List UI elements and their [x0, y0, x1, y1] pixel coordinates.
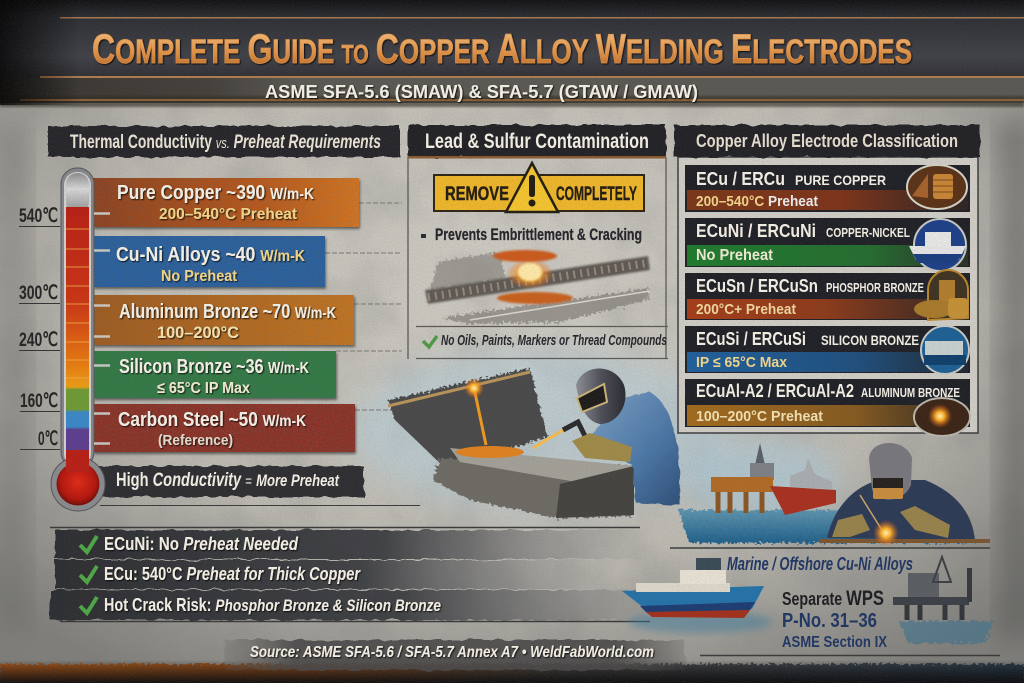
row: aluminum bronze: 100–200°C Preheat [696, 408, 823, 425]
panel: thermal conductivity vs preheat [19, 126, 420, 511]
row: aluminum bronze: ALUMINUM BRONZE [861, 385, 960, 400]
icon: offshore platform [921, 326, 969, 374]
row: phosphor bronze: PHOSPHOR BRONZE [826, 280, 924, 295]
bar: copper-nickel alloys: No Preheat [161, 268, 238, 285]
subtitle: ASME SFA-5.6 (SMAW) & SFA-5.7 (GTAW / GMAW) [265, 82, 698, 102]
plate [388, 368, 547, 470]
water [678, 510, 975, 543]
red ship [770, 458, 836, 515]
panel: electrode classification [674, 125, 980, 436]
bar: pure copper: Pure Copper ~390 W/m-K [117, 182, 314, 204]
bar: aluminum bronze: Aluminum Bronze ~70 W/m-K [119, 301, 336, 323]
heading: classification: Copper Alloy Electrode Classification [696, 131, 958, 151]
illustration: welder at copper plate [388, 368, 680, 518]
header band [0, 0, 1024, 107]
molten pool [456, 446, 524, 458]
row: silicon bronze [685, 326, 970, 373]
temperature scale: 240℃ [19, 330, 58, 351]
row: silicon bronze: SILICON BRONZE [821, 332, 919, 348]
warning sign: REMOVE [445, 184, 509, 205]
panel: lead and sulfur contamination [408, 125, 668, 359]
helmet [869, 443, 912, 500]
temperature guide lines [100, 203, 420, 506]
gloves [832, 506, 950, 538]
illustration: weld on rod [425, 250, 650, 324]
base block [432, 458, 632, 518]
icon: bronze coins [914, 270, 968, 320]
band: no preheat note [55, 530, 655, 559]
welder body [585, 392, 680, 505]
row: silicon bronze: ECuSi / ERCuSi [696, 329, 806, 349]
row: phosphor bronze: 200°C+ Preheat [696, 301, 796, 318]
band: thick copper note [55, 560, 615, 589]
band: hot crack note [50, 590, 690, 620]
bullet text: Prevents Embrittlement & Cracking [435, 225, 642, 244]
warning sign [434, 163, 644, 212]
panel frame [408, 157, 668, 359]
row: copper-nickel [685, 218, 970, 267]
arc glow [464, 378, 484, 398]
welder body [827, 480, 975, 540]
source line [225, 640, 685, 670]
bullet text [421, 225, 642, 244]
callout: high conductivity: High Conductivity = More Preheat [116, 470, 340, 491]
heading: classification [674, 125, 980, 157]
sparks [873, 520, 899, 546]
text: wps: Separate WPS [782, 587, 884, 610]
bar: pure copper [93, 178, 359, 227]
icon: copper stock [907, 165, 967, 209]
text: wps: P-No. 31–36 [782, 610, 877, 632]
bar: copper-nickel alloys [93, 236, 325, 287]
row: phosphor bronze: ECuSn / ERCuSn [696, 276, 818, 296]
bar: carbon steel [93, 404, 355, 452]
offshore platform [893, 557, 994, 643]
band: hot crack note: Hot Crack Risk: Phosphor Bronze & Silicon Bronze [104, 595, 441, 615]
temperature scale [19, 206, 60, 450]
band: thick copper note: ECu: 540°C Preheat for Thick Copper [104, 564, 361, 584]
panel frame [678, 157, 978, 433]
heading: lead and sulfur: Lead & Sulfur Contamination [425, 130, 649, 153]
row: phosphor bronze [685, 273, 970, 320]
row: copper-nickel: No Preheat [696, 247, 774, 264]
temperature scale: 300℃ [19, 283, 58, 304]
band: no preheat note: ECuNi: No Preheat Needed [104, 534, 299, 554]
visor [873, 478, 903, 488]
title: COMPLETE GUIDE TO COPPER ALLOY WELDING ELECTRODES [92, 25, 912, 72]
callout: high conductivity [96, 466, 364, 497]
temperature scale: 540℃ [19, 206, 58, 227]
temperature scale: 160℃ [20, 391, 58, 412]
bar: carbon steel: Carbon Steel ~50 W/m-K [118, 409, 306, 431]
icon: aluminum bronze part [914, 398, 970, 436]
row: copper-nickel: COPPER-NICKEL [826, 225, 910, 240]
row: copper-nickel: ECuNi / ERCuNi [696, 221, 816, 241]
heading: marine: Marine / Offshore Cu-Ni Alloys [727, 554, 913, 574]
icon: ship [909, 219, 966, 271]
torch [860, 495, 885, 535]
helmet visor [577, 384, 607, 412]
row: pure copper: 200–540°C Preheat [696, 193, 818, 210]
weld bead [474, 388, 486, 445]
bar: silicon bronze: Silicon Bronze ~36 W/m-K [119, 356, 309, 378]
helmet [576, 368, 625, 424]
source line: Source: ASME SFA-5.6 / SFA-5.7 Annex A7 • WeldFabWorld.com [250, 644, 654, 661]
panel: key takeaways [50, 530, 690, 620]
heading: thermal conductivity: Thermal Conductivity vs. Preheat Requirements [70, 132, 381, 153]
bar: silicon bronze [93, 351, 336, 398]
illustration: offshore scene with welder [678, 443, 990, 546]
heading: thermal conductivity [48, 126, 400, 157]
torch [563, 422, 586, 438]
temperature scale: 0℃ [38, 429, 58, 450]
bar: silicon bronze: ≤ 65°C IP Max [157, 380, 250, 397]
row: aluminum bronze [685, 379, 970, 427]
torch flame [533, 429, 565, 448]
helmet window [873, 478, 903, 499]
work surface [820, 539, 990, 543]
bar: pure copper: 200–540°C Preheat [159, 206, 298, 223]
row: aluminum bronze: ECuAl-A2 / ERCuAl-A2 [696, 381, 854, 401]
thermometer [51, 168, 110, 511]
bar: aluminum bronze: 100–200°C [157, 323, 239, 342]
checked note: No Oils, Paints, Markers or Thread Compounds [441, 332, 667, 349]
row: pure copper: ECu / ERCu [696, 169, 785, 189]
row: silicon bronze: IP ≤ 65°C Max [696, 354, 788, 371]
heading: lead and sulfur [408, 125, 666, 158]
bottom edge band [0, 660, 1024, 683]
checked note [423, 332, 667, 349]
blue ship [622, 558, 772, 633]
text: wps: ASME Section IX [782, 634, 887, 651]
bar: aluminum bronze [93, 295, 354, 345]
warning sign: COMPLETELY [556, 184, 637, 205]
bar: copper-nickel alloys: Cu-Ni Alloys ~40 W/m-K [116, 244, 305, 266]
decorative rules [50, 528, 1000, 656]
text: wps [782, 587, 887, 651]
row: pure copper [685, 165, 970, 212]
row: pure copper: PURE COPPER [795, 172, 886, 188]
bar: carbon steel: (Reference) [158, 432, 233, 449]
glove [572, 433, 632, 462]
panel: marine and offshore [622, 554, 994, 651]
offshore rig [711, 443, 774, 513]
